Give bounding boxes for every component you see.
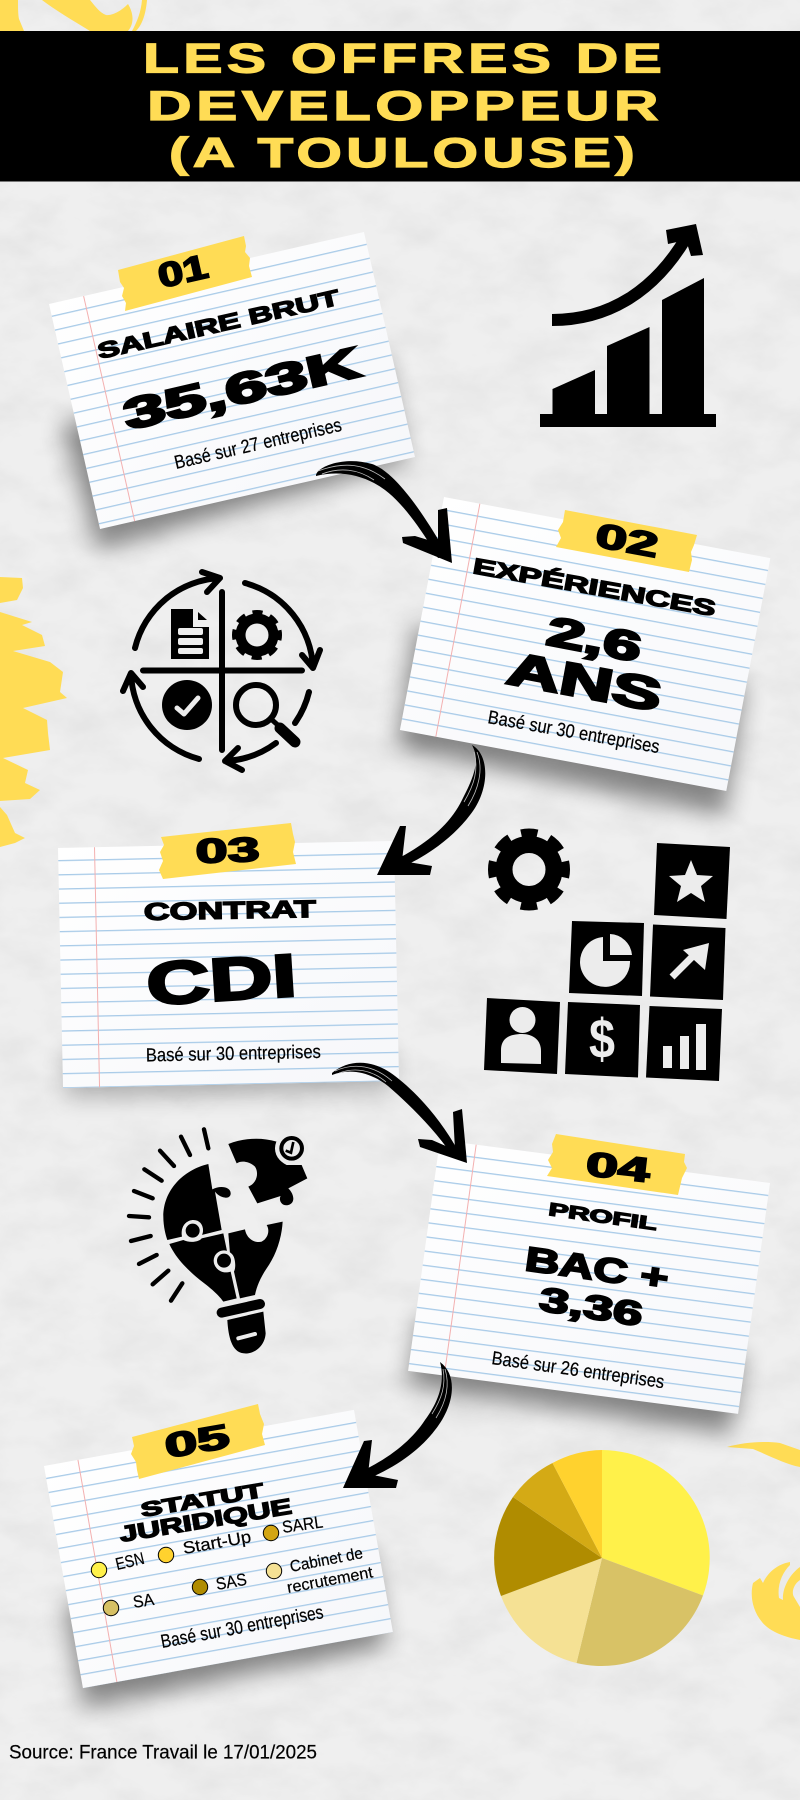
legend SA — [103, 1590, 156, 1616]
heading statut: STATUT — [139, 1480, 265, 1522]
legend SAS — [192, 1570, 248, 1595]
tape 03: 03 — [195, 831, 260, 871]
card shadows — [62, 355, 745, 1708]
tape 04: 04 — [584, 1145, 652, 1190]
note: Basé sur 30 entreprises — [159, 1602, 325, 1653]
tape 05 — [131, 1404, 265, 1479]
legend cabinet de recrutement: recrutement — [286, 1564, 375, 1597]
slice SAS — [494, 1497, 602, 1596]
legend SARL — [263, 1512, 324, 1541]
sheet 01 — [49, 232, 415, 529]
tape 03 — [159, 823, 296, 879]
legend cabinet de recrutement — [266, 1545, 375, 1597]
arrow: card 02 to 03 — [377, 745, 485, 875]
decorative brush: right — [727, 1442, 800, 1640]
heading contrat: CONTRAT — [144, 896, 317, 926]
heading salaire brut: SALAIRE BRUT — [95, 285, 342, 364]
slice SA — [576, 1558, 703, 1666]
magnifier glyph — [236, 685, 295, 742]
legend SA: SA — [132, 1590, 156, 1612]
tile pie — [569, 921, 644, 996]
title line 1: LES OFFRES DE — [143, 34, 666, 82]
value CDI: CDI — [145, 942, 299, 1018]
panel: card 04 profil — [408, 1134, 770, 1414]
tape 02: 02 — [593, 517, 661, 565]
legend SAS: SAS — [214, 1570, 248, 1594]
title line 2: DEVELOPPEUR — [147, 82, 663, 129]
tile dollar: $ — [589, 1007, 615, 1070]
tile star — [654, 843, 730, 919]
tile person — [484, 998, 560, 1074]
icon: gear — [486, 826, 572, 913]
slice Start-Up — [552, 1450, 602, 1558]
legend — [91, 1512, 375, 1616]
sheet 04 — [408, 1140, 770, 1414]
tape 05: 05 — [162, 1417, 232, 1466]
note: Basé sur 27 entreprises — [172, 415, 344, 474]
legend ESN — [91, 1549, 146, 1578]
note: Basé sur 26 entreprises — [490, 1348, 666, 1393]
icon: rising bar chart — [540, 224, 716, 427]
pie chart — [494, 1450, 710, 1666]
title banner — [0, 31, 800, 182]
document glyph — [171, 609, 209, 659]
panel: card 03 contrat — [58, 823, 399, 1088]
tape 04 — [547, 1134, 687, 1195]
sheet 03 — [58, 841, 399, 1088]
arrow: card 03 to 04 — [332, 1063, 467, 1163]
value 3,36: 3,36 — [537, 1280, 645, 1334]
title line 3: (A TOULOUSE) — [169, 129, 639, 176]
gear glyph — [231, 609, 283, 661]
tile bars — [646, 1006, 722, 1081]
decorative brush: left — [0, 577, 67, 847]
panel: card 05 statut juridique — [44, 1404, 393, 1688]
tile arrow — [650, 924, 726, 1000]
slice ESN — [602, 1450, 710, 1596]
icon: tile grid — [484, 843, 730, 1081]
note: Basé sur 30 entreprises — [146, 1042, 321, 1066]
icon: process cycle — [123, 572, 320, 770]
arrow: card 01 to 02 — [316, 461, 452, 563]
slice Cabinet de recrutement — [501, 1558, 602, 1663]
tape 01: 01 — [154, 248, 212, 296]
value 2,6: 2,6 — [543, 608, 645, 671]
sheet 05 — [44, 1410, 393, 1688]
sheet 02 — [400, 497, 770, 791]
panel: card 01 salaire brut — [49, 232, 415, 529]
panel: card 02 expériences — [400, 497, 770, 791]
value ANS: ANS — [503, 642, 666, 721]
decorative brush: top left — [0, 0, 147, 31]
source: Source: France Travail le 17/01/2025 — [9, 1742, 317, 1764]
heading juridique: JURIDIQUE — [118, 1494, 293, 1547]
slice SARL — [513, 1463, 602, 1558]
tape 02 — [556, 510, 697, 572]
arrow: card 04 to 05 — [343, 1362, 452, 1488]
legend cabinet de recrutement: Cabinet de — [289, 1545, 364, 1576]
note: Basé sur 30 entreprises — [486, 707, 661, 758]
icon: puzzle light bulb — [129, 1129, 308, 1354]
legend SARL: SARL — [281, 1512, 324, 1537]
heading profil: PROFIL — [547, 1199, 658, 1234]
check glyph — [162, 680, 212, 730]
value 35,63K: 35,63K — [119, 339, 365, 440]
heading expériences: EXPÉRIENCES — [471, 553, 718, 621]
legend Start-Up: Start-Up — [181, 1527, 253, 1558]
tape 01 — [118, 236, 252, 311]
tile dollar — [565, 1002, 640, 1078]
legend ESN: ESN — [114, 1549, 146, 1574]
legend Start-Up — [158, 1527, 253, 1563]
value bac +: BAC + — [523, 1240, 671, 1298]
